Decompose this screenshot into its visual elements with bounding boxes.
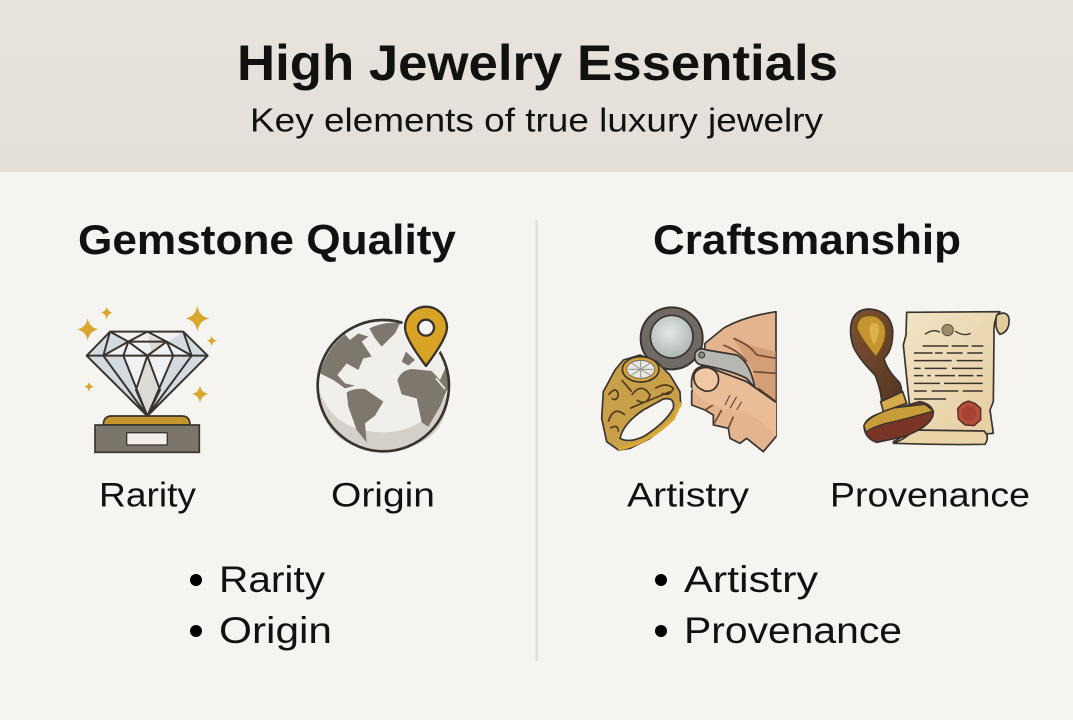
panel: craftsmanship: [602, 216, 1030, 651]
bullet list: [190, 559, 332, 651]
icon: diamond on pedestal: [77, 306, 217, 452]
bullet list: Artistry: [684, 559, 819, 600]
panel: gemstone quality: [77, 216, 457, 651]
label: provenance: Provenance: [830, 476, 1030, 514]
header band: [0, 0, 1073, 172]
heading: gemstone quality: Gemstone Quality: [78, 216, 457, 263]
bullet list: Origin: [219, 610, 332, 651]
icon: ring with loupe and hand: [602, 307, 776, 452]
label: origin: Origin: [331, 476, 435, 514]
heading: craftsmanship: Craftsmanship: [653, 216, 961, 263]
icon: provenance scroll and wax stamp: [851, 309, 1009, 445]
bullet list: Provenance: [684, 610, 902, 651]
bullet list: [655, 559, 902, 651]
icon: globe with location pin: [318, 307, 449, 451]
title: High Jewelry Essentials: [237, 35, 838, 91]
label: artistry: Artistry: [627, 476, 749, 514]
bullet list: Rarity: [219, 559, 326, 600]
subtitle: Key elements of true luxury jewelry: [250, 102, 824, 138]
label: rarity: Rarity: [99, 476, 196, 514]
